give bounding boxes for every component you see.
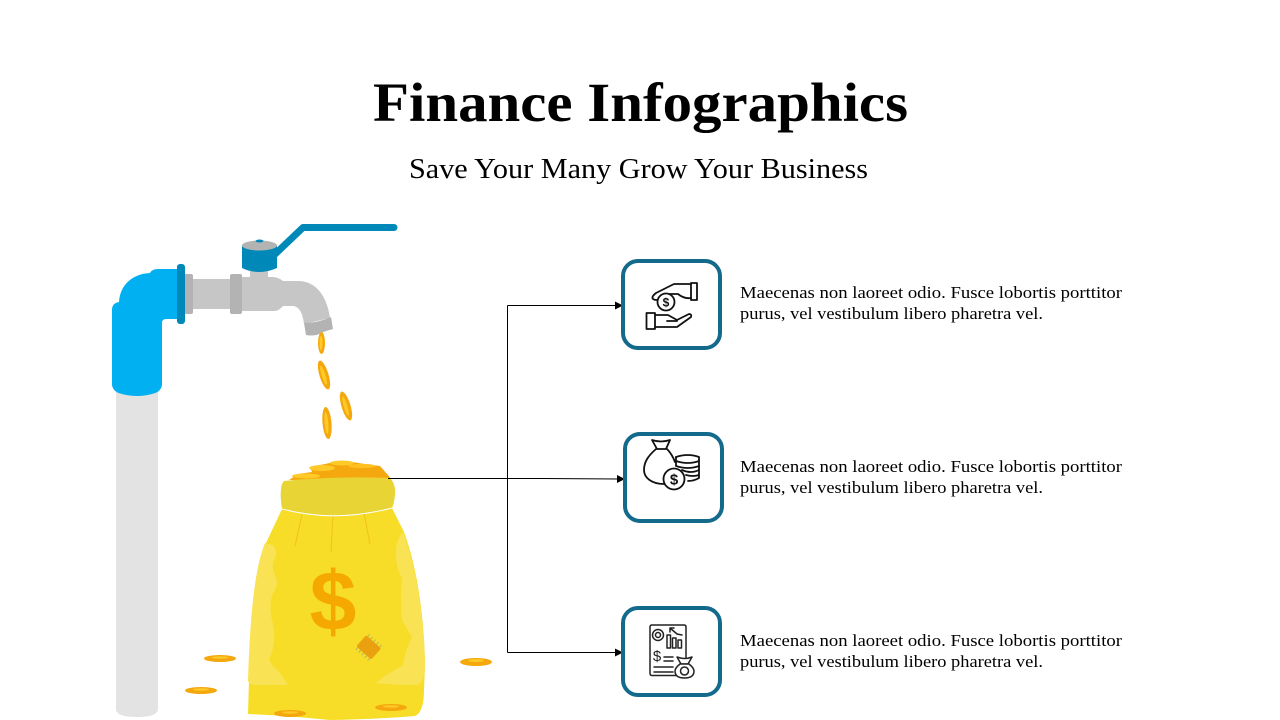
faucet and pipe illustration (112, 228, 394, 717)
text block 2: Maecenas non laoreet odio. Fusce lobortis porttitor (740, 457, 1123, 476)
patch on the bag (354, 633, 383, 662)
bag collar (281, 477, 395, 516)
coins heaped on the bag (289, 460, 391, 480)
text block 3 (740, 631, 1123, 671)
collar edge (282, 508, 392, 516)
card 2 (625, 434, 1123, 521)
floor coin 5 (375, 704, 407, 711)
floor coin 4 (274, 710, 306, 717)
card 3 (623, 608, 1123, 695)
coin 2 (315, 359, 333, 391)
floor coin 1 (204, 655, 236, 662)
floor coin 2 (185, 687, 217, 694)
arrow to third box (508, 648, 623, 656)
grey connector pipe (190, 279, 232, 309)
icon: money bag and coins (644, 440, 699, 490)
blue flange (177, 264, 185, 324)
bag body (248, 508, 425, 720)
coin 1 (318, 332, 325, 354)
floor coin 3 (460, 658, 492, 666)
text block 3: Maecenas non laoreet odio. Fusce lobortis porttitor (740, 631, 1123, 650)
icon box 3 (623, 608, 720, 695)
text block 1 (740, 283, 1123, 323)
vertical grey pipe (116, 385, 158, 717)
report dollar: $ (653, 648, 662, 665)
left connector collar (184, 274, 193, 314)
faucet body and spout (238, 277, 330, 324)
text block 1: Maecenas non laoreet odio. Fusce lobortis porttitor (740, 283, 1123, 302)
spout nozzle (304, 317, 333, 336)
arrow to first box (508, 302, 623, 310)
coin dollar: $ (663, 296, 670, 310)
icon: financial report (650, 625, 694, 678)
dollar sign: $ (310, 554, 356, 648)
connector trunk (388, 306, 618, 652)
icon: hands exchanging a coin (646, 283, 697, 329)
text block 3: purus, vel vestibulum libero pharetra vel. (740, 652, 1043, 671)
valve handle (272, 228, 394, 257)
icon box 2 (625, 434, 722, 521)
card 1 (623, 261, 1123, 348)
valve stem (250, 268, 268, 280)
falling coins (315, 332, 355, 439)
money bag (248, 460, 425, 720)
right highlight (376, 532, 425, 685)
valve cap (242, 245, 277, 272)
subtitle: Save Your Many Grow Your Business (409, 154, 868, 185)
text block 2: purus, vel vestibulum libero pharetra vel. (740, 478, 1043, 497)
coins on the floor (185, 655, 492, 717)
title: Finance Infographics (373, 72, 908, 133)
icon box 1 (623, 261, 720, 348)
arrow to second box (617, 475, 625, 483)
bag fold lines (295, 513, 370, 552)
coin dollar: $ (670, 472, 679, 488)
valve button (256, 240, 264, 242)
left highlight (248, 543, 288, 685)
coin 3 (337, 390, 355, 422)
coin 4 (321, 407, 333, 439)
connector lines with arrows (388, 302, 625, 656)
blue elbow joint (112, 269, 180, 396)
valve top (242, 240, 277, 250)
middle collar (230, 274, 242, 314)
text block 2 (740, 457, 1123, 497)
text block 1: purus, vel vestibulum libero pharetra vel. (740, 304, 1043, 323)
